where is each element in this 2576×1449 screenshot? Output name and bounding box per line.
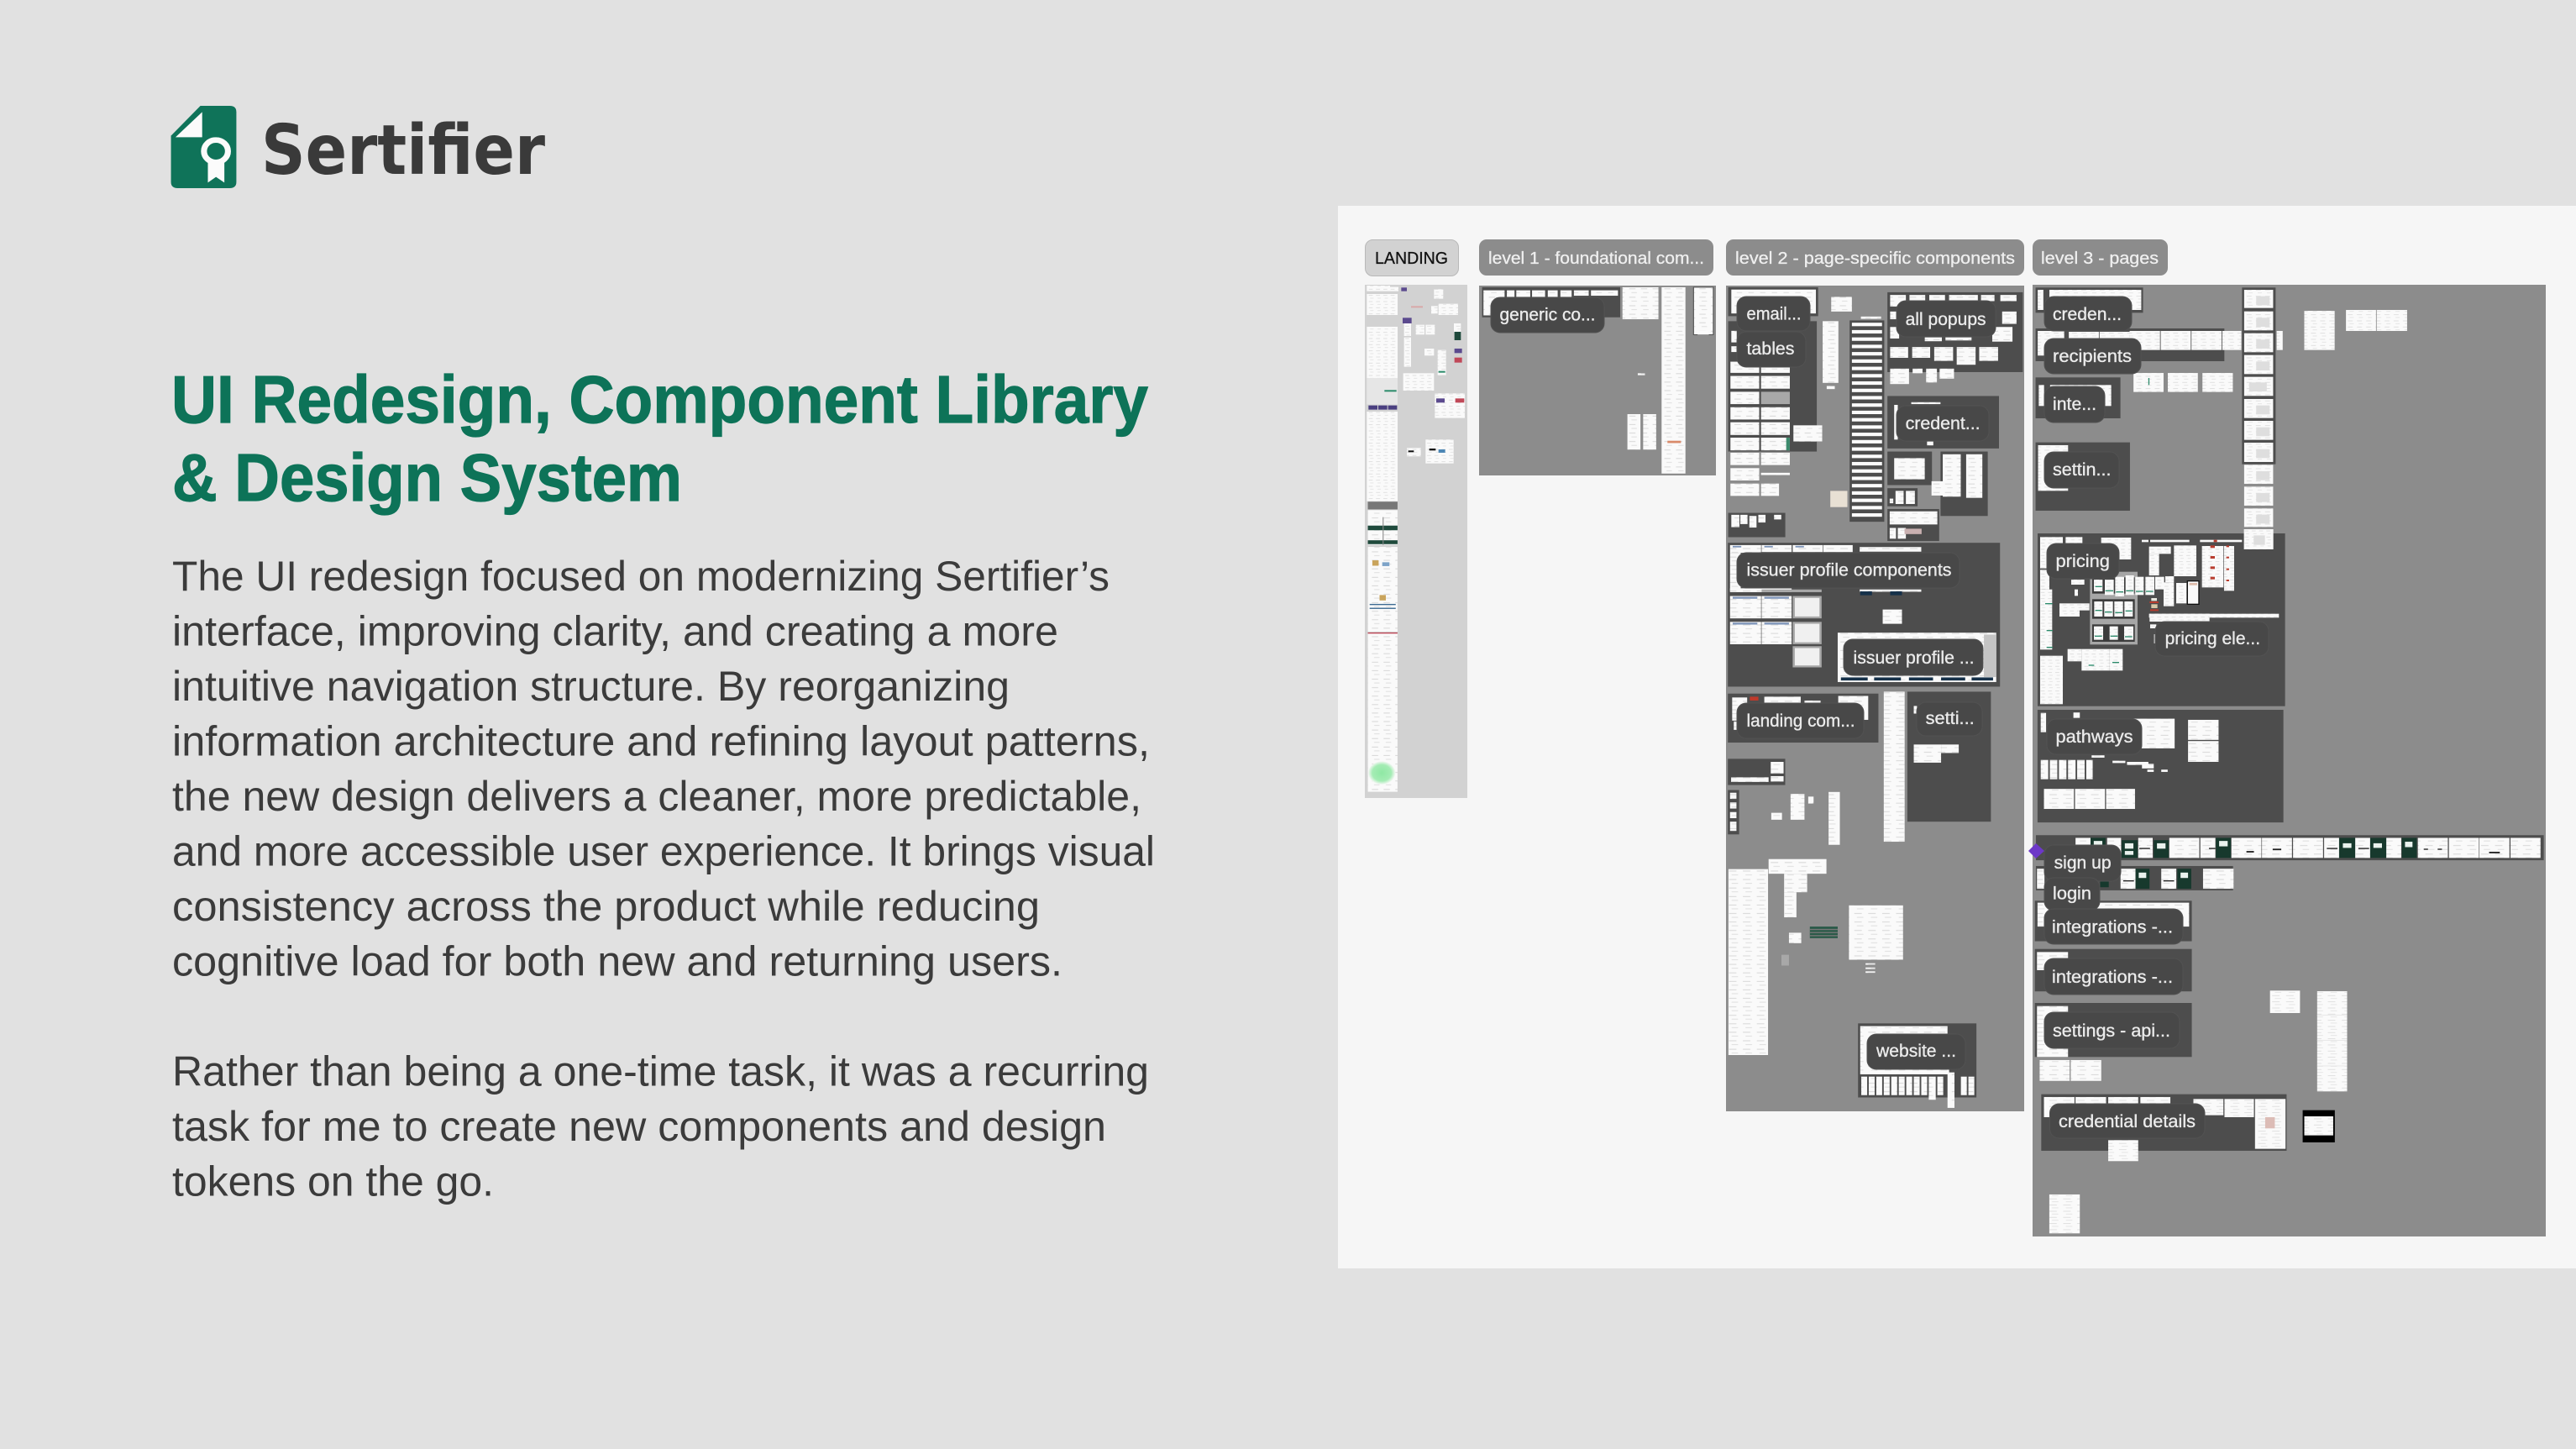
label: credentials page: creden...: [2053, 305, 2122, 324]
icon: purple component diamond: [2028, 843, 2044, 858]
text block: description paragraph: intuitive navigation structure. By reorganizing: [172, 663, 1010, 710]
label: pricing elements: pricing ele...: [2165, 629, 2260, 648]
label: sign up: sign up: [2054, 853, 2112, 873]
upper thumbnails: [2036, 287, 2407, 527]
panel: Figma canvas: [1338, 206, 2576, 1268]
label: issuer profile components: [1737, 553, 1960, 588]
lower thumbnails: [2041, 990, 2348, 1233]
label: sign up: [2044, 845, 2121, 881]
label: integrations two: integrations -...: [2052, 968, 2173, 987]
label: pricing elements: [2155, 622, 2269, 656]
label: pricing: [2047, 543, 2119, 579]
heading: & Design System: [172, 440, 682, 515]
label: pathways: pathways: [2056, 727, 2133, 747]
text block: description paragraph: information architecture and refining layout patterns,: [172, 717, 1150, 764]
logo: Sertifier: [171, 106, 545, 191]
wordmark: Sertifier: [261, 111, 545, 191]
text block: description paragraph: [172, 553, 1155, 984]
label: settings api: [2044, 1012, 2180, 1048]
label: credentials page: [2044, 297, 2132, 331]
label: pathways: [2047, 719, 2142, 754]
label: all popups: all popups: [1906, 310, 1986, 329]
text block: description paragraph: and more accessible user experience. It brings visual: [172, 828, 1155, 875]
tag: level 3: [2033, 239, 2168, 276]
icon: certificate document: [171, 106, 236, 188]
lower thumbnails: [1728, 543, 2000, 1108]
middle thumbnails: [2035, 710, 2544, 1081]
label: integrations page: inte...: [2053, 395, 2096, 414]
pricing frame thumbnails: [2038, 529, 2285, 706]
upper thumbnails: [1729, 287, 2023, 541]
label: landing components: landing com...: [1747, 711, 1855, 731]
ladder stripes: [1852, 323, 1882, 517]
label: login: [2044, 878, 2100, 911]
label: credentials: [1897, 406, 1989, 441]
label: landing components: [1737, 703, 1864, 738]
label: integrations page: [2044, 386, 2105, 423]
section: level 3 pages: [2028, 285, 2546, 1236]
tag: level 2: [1726, 239, 2024, 276]
label: settings: [1917, 702, 1982, 736]
label: credential details: credential details: [2059, 1112, 2196, 1131]
text block: description paragraph: the new design delivers a cleaner, more predictable,: [172, 773, 1141, 820]
text block: recurring task paragraph: tokens on the go.: [172, 1158, 494, 1205]
heading: UI Redesign, Component Library: [171, 362, 1148, 437]
label: generic components: generic co...: [1500, 306, 1596, 324]
labels: level 2 frames: [1491, 297, 1996, 1069]
label: credential details: [2049, 1104, 2205, 1138]
label: website: [1867, 1034, 1965, 1069]
heading: [171, 362, 1148, 515]
label: email: [1737, 297, 1810, 331]
labels: level 3 frames: [2044, 297, 2269, 1138]
label: all popups: [1897, 301, 1996, 337]
text block: recurring task paragraph: task for me to create new components and design: [172, 1103, 1106, 1150]
label: integrations two: [2044, 958, 2183, 995]
label: recipients: [2044, 339, 2141, 374]
label: settings: setti...: [1926, 709, 1975, 728]
label: settings api: settings - api...: [2053, 1021, 2170, 1041]
text block: description paragraph: cognitive load for both new and returning users.: [172, 937, 1062, 984]
label: email: email...: [1747, 304, 1801, 324]
section: level 1 foundational components: [1479, 286, 1716, 475]
label: login: login: [2053, 884, 2091, 904]
text block: description paragraph: The UI redesign focused on modernizing Sertifier’s: [172, 553, 1110, 600]
label: recipients: recipients: [2053, 347, 2132, 366]
label: issuer profile components: issuer profile components: [1747, 561, 1952, 580]
text block: recurring task paragraph: Rather than being a one-time task, it was a recurring: [172, 1048, 1149, 1095]
label: credentials: credent...: [1906, 414, 1981, 433]
label: issuer profile: issuer profile ...: [1853, 648, 1974, 668]
label: settings page: [2044, 452, 2119, 488]
label: integrations one: [2044, 909, 2183, 944]
label: generic components: [1491, 297, 1604, 333]
text block: description paragraph: interface, improving clarity, and creating a more: [172, 608, 1058, 655]
label: tables: tables: [1747, 339, 1794, 359]
tag: LANDING: LANDING: [1375, 249, 1448, 268]
section: level 2 page-specific components: [1726, 286, 2024, 1111]
label: issuer profile: [1844, 639, 1983, 675]
tag: level 1: level 1 - foundational com...: [1488, 249, 1704, 268]
label: tables: [1737, 332, 1806, 367]
tag: level 1: [1479, 239, 1713, 276]
tag: LANDING: [1366, 240, 1458, 276]
label: website: website ...: [1876, 1042, 1956, 1061]
tag: level 2: level 2 - page-specific components: [1735, 249, 2015, 268]
label: settings page: settin...: [2053, 460, 2112, 480]
text block: description paragraph: consistency across the product while reducing: [172, 883, 1040, 930]
tag: level 3: level 3 - pages: [2041, 249, 2159, 268]
label: pricing: pricing: [2056, 552, 2110, 571]
section: landing thumbnails: [1365, 285, 1467, 798]
text block: recurring task paragraph: [172, 1048, 1149, 1205]
label: integrations one: integrations -...: [2052, 917, 2173, 937]
